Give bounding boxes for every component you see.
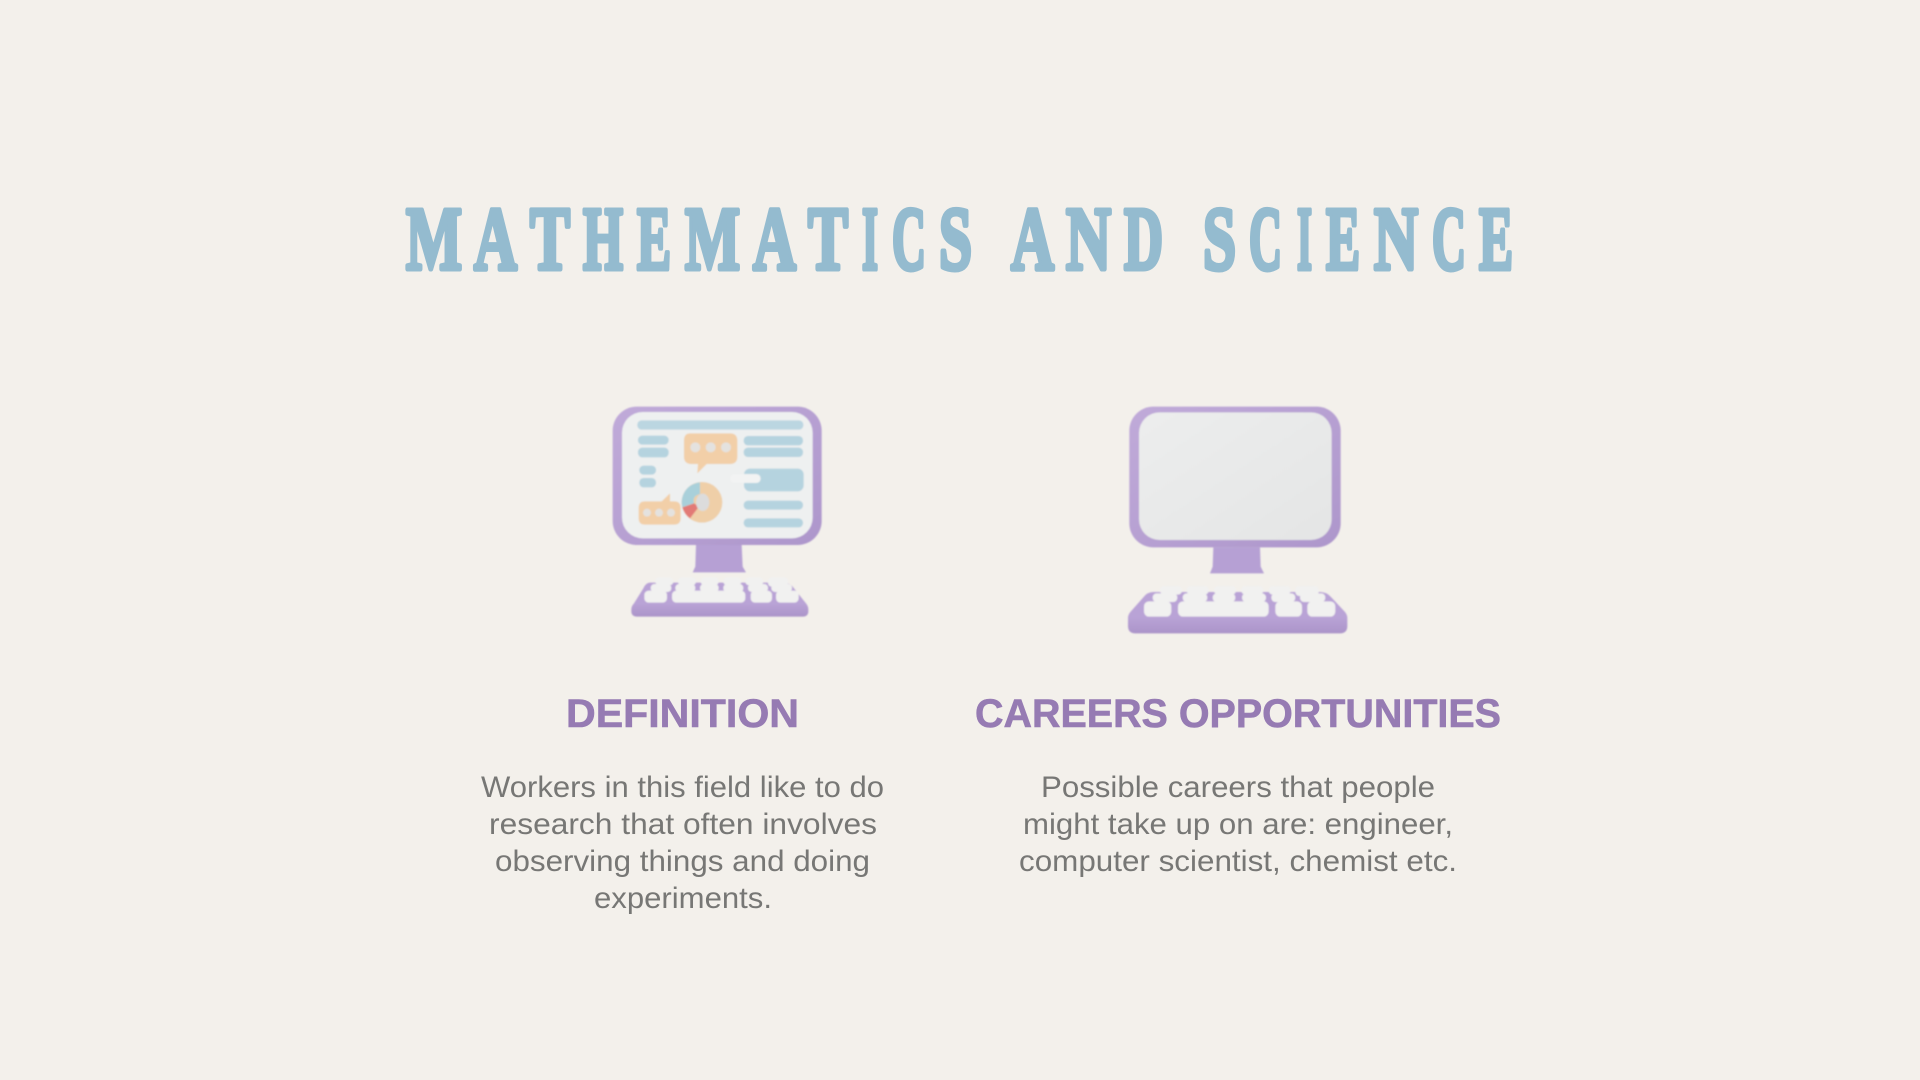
icon: computer with blank screen: [1128, 407, 1347, 633]
title: S: [1203, 190, 1236, 289]
title: E: [1479, 190, 1513, 289]
text block: careers: computer scientist, chemist etc.: [1019, 845, 1457, 878]
text block: definition: experiments.: [594, 882, 772, 915]
title: M: [685, 190, 740, 289]
title: S: [939, 190, 972, 289]
title: A: [474, 190, 517, 289]
title: T: [530, 190, 570, 289]
text block: definition: Workers in this field like to do: [481, 771, 884, 804]
title: M: [406, 190, 462, 289]
title: E: [1326, 190, 1360, 289]
title: T: [808, 190, 848, 289]
title: I: [862, 190, 878, 289]
title: E: [637, 190, 671, 289]
title: I: [1297, 190, 1312, 289]
heading: definition: DEFINITION: [566, 692, 799, 736]
text block: definition: [481, 771, 884, 915]
icon: computer with dashboard: [613, 407, 822, 617]
title: A: [1011, 190, 1054, 289]
text block: careers: [1019, 771, 1457, 878]
title: C: [1249, 190, 1282, 289]
title: N: [1374, 190, 1418, 289]
heading: careers opportunities: CAREERS OPPORTUNITIES: [975, 692, 1501, 736]
title: H: [583, 190, 623, 289]
text block: definition: observing things and doing: [495, 845, 870, 878]
title: D: [1124, 190, 1163, 289]
title: N: [1066, 190, 1111, 289]
text block: careers: Possible careers that people: [1041, 771, 1435, 804]
text block: definition: research that often involves: [489, 808, 877, 841]
text block: careers: might take up on are: engineer,: [1023, 808, 1453, 841]
title: A: [753, 190, 796, 289]
title: C: [1432, 190, 1466, 289]
title: C: [892, 190, 926, 289]
